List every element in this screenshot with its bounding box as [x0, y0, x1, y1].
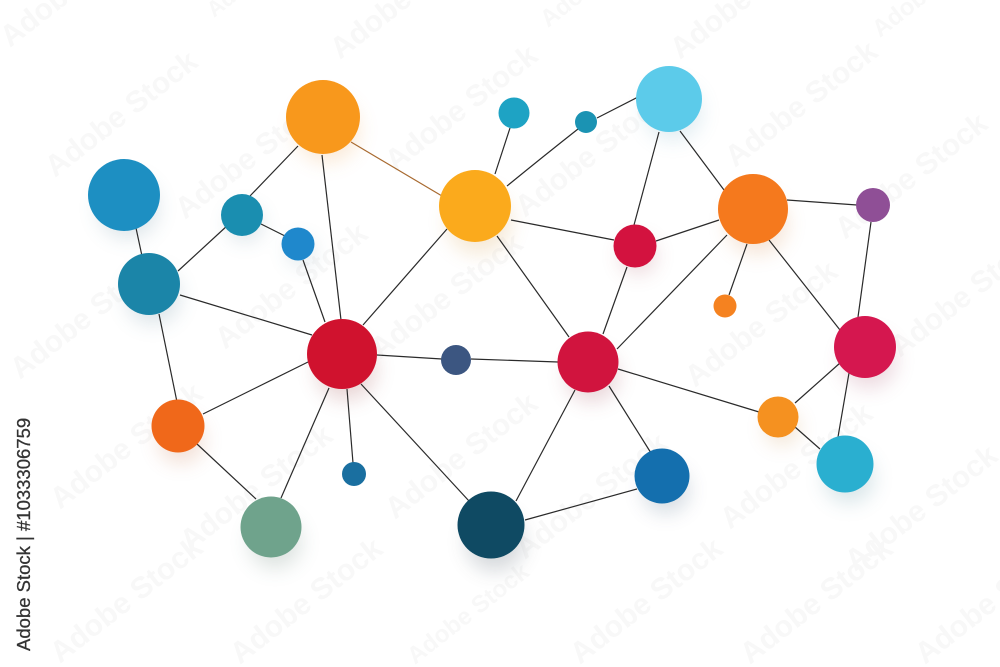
node: large orange: [286, 80, 360, 154]
watermarks: Adobe Stock: [734, 531, 899, 667]
network nodes: [88, 66, 896, 558]
watermarks: Adobe Stock: [829, 106, 994, 246]
watermarks: Adobe Stock: [44, 530, 209, 667]
watermarks: Adobe Stock: [839, 438, 1000, 578]
watermarks: Adobe Stock: [719, 34, 884, 174]
watermarks: Adobe Stock: [402, 558, 535, 667]
watermarks: Adobe Stock: [509, 426, 674, 566]
node: dark teal: [458, 492, 524, 558]
node: red hub: [307, 319, 377, 389]
node: small orange: [714, 294, 736, 318]
node: orange red: [152, 400, 204, 452]
node: orange right: [718, 174, 788, 244]
node: crimson upper: [614, 224, 656, 268]
watermarks: Adobe Stock: [224, 531, 389, 667]
node: small blue: [342, 462, 366, 486]
node: small teal: [498, 98, 530, 128]
node: dark teal-blue: [118, 253, 180, 315]
watermarks: Adobe Stock: [379, 386, 544, 526]
watermarks: Adobe Stock: [174, 418, 339, 558]
network connections: [136, 96, 871, 520]
watermarks: Adobe Stock: [44, 376, 209, 516]
node: amber: [439, 170, 511, 242]
node: blue: [282, 228, 314, 260]
node: sage green: [240, 496, 302, 558]
node: orange lower right: [758, 396, 798, 438]
watermarks: Adobe Stock: [679, 254, 844, 394]
node: teal: [221, 194, 263, 236]
node: large blue: [88, 159, 160, 231]
watermarks: Adobe Stock: [39, 44, 204, 184]
node: navy: [441, 345, 471, 375]
node shadows: [98, 84, 896, 571]
node: light blue: [636, 66, 702, 132]
watermarks: Adobe Stock: [509, 84, 674, 224]
node: tiny teal: [575, 111, 597, 133]
watermarks: Adobe Stock: [209, 216, 374, 356]
watermarks: Adobe Stock: [714, 396, 879, 536]
watermarks: Adobe Stock: [169, 86, 334, 226]
node: sky blue lower: [816, 436, 874, 492]
node: blue lower: [634, 448, 690, 504]
watermarks: Adobe Stock: [379, 38, 544, 178]
watermarks: Adobe Stock: [4, 246, 169, 386]
watermarks: Adobe Stock: [564, 531, 729, 667]
watermarks: Adobe Stock: [364, 226, 529, 366]
vertical stock id: Adobe Stock | #1033306759: [13, 418, 34, 651]
node: pink: [834, 316, 896, 378]
node: red center: [558, 332, 618, 392]
node: purple: [856, 188, 890, 222]
